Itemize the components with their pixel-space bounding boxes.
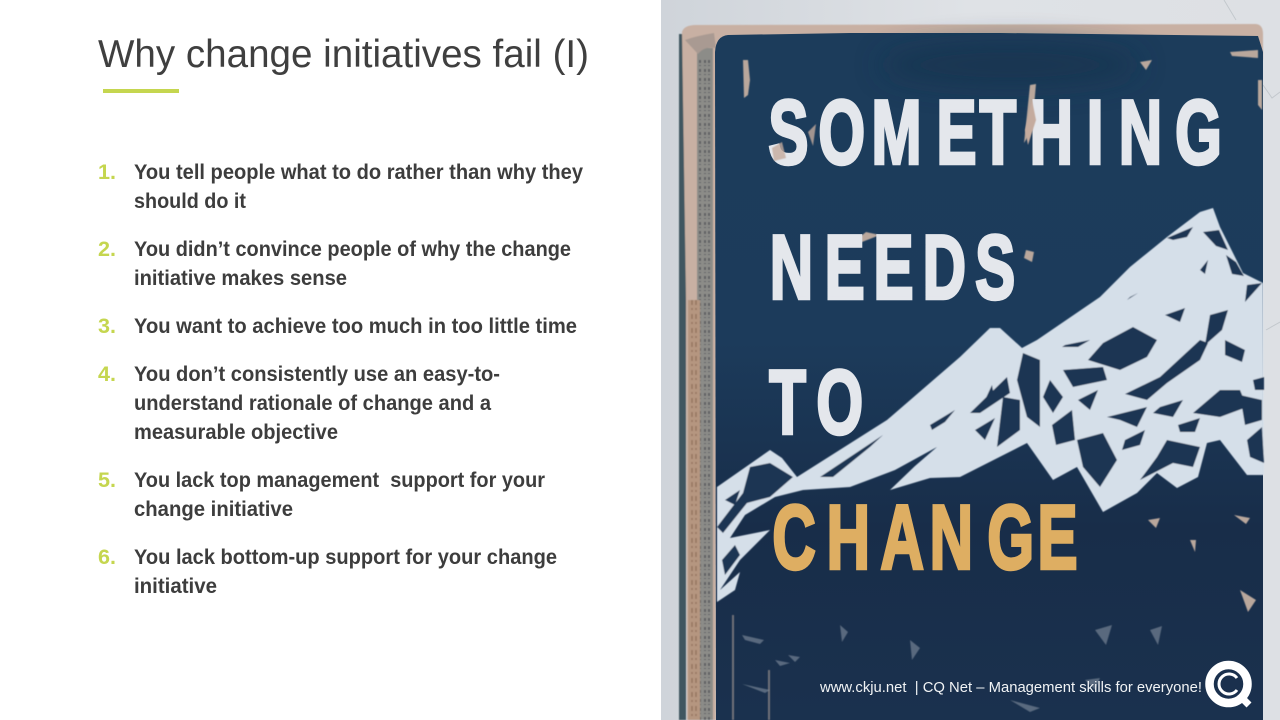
title: Why change initiatives fail (I): [98, 33, 589, 76]
book title: NEEDS: NEEDS: [770, 217, 1015, 318]
footer tagline: www.ckju.net | CQ Net – Management skills for everyone!: [819, 679, 1202, 696]
book title: SOMETHING: SOMETHING: [768, 82, 1222, 183]
list item 6: initiative: [134, 575, 217, 598]
book title: CHANGE: CHANGE: [772, 487, 1078, 588]
list item 3: You want to achieve too much in too little time: [134, 315, 577, 338]
panel: book cover photo: [661, 0, 1280, 720]
list item 4: [98, 363, 500, 444]
list item 4: understand rationale of change and a: [134, 392, 491, 415]
list item 3: 3.: [98, 315, 116, 338]
book title: TO: TO: [769, 352, 863, 453]
cover dark patch: [880, 43, 1140, 87]
list item 5: change initiative: [134, 498, 293, 521]
panel: left white text panel: [0, 0, 661, 720]
book spine: [679, 24, 1263, 720]
list item 1: You tell people what to do rather than why they: [134, 161, 583, 184]
list item 2: You didn’t convince people of why the change: [134, 238, 571, 261]
mountain illustration: [717, 208, 1264, 602]
faint lower cover scuffs: [742, 625, 1162, 712]
list item 2: [98, 238, 571, 290]
title underline accent: [103, 89, 179, 93]
letter wear chips: [772, 100, 1036, 161]
list item 2: 2.: [98, 238, 116, 261]
icon: CQ logo: [1210, 665, 1249, 705]
list item 4: 4.: [98, 363, 116, 386]
list item 5: 5.: [98, 469, 116, 492]
numbered list of reasons: [98, 161, 583, 598]
list item 1: 1.: [98, 161, 116, 184]
snow shadow flecks: [717, 227, 1264, 575]
book cover: [715, 33, 1263, 720]
list item 1: should do it: [134, 190, 246, 213]
list item 6: You lack bottom-up support for your change: [134, 546, 557, 569]
list item 4: You don’t consistently use an easy-to-: [134, 363, 500, 386]
list item 5: You lack top management support for your: [134, 469, 545, 492]
list item 1: [98, 161, 583, 213]
cover wear chips: [732, 50, 1262, 720]
list item 2: initiative makes sense: [134, 267, 347, 290]
list item 6: 6.: [98, 546, 116, 569]
list item 4: measurable objective: [134, 421, 338, 444]
list item 6: [98, 546, 557, 598]
list item 5: [98, 469, 545, 521]
